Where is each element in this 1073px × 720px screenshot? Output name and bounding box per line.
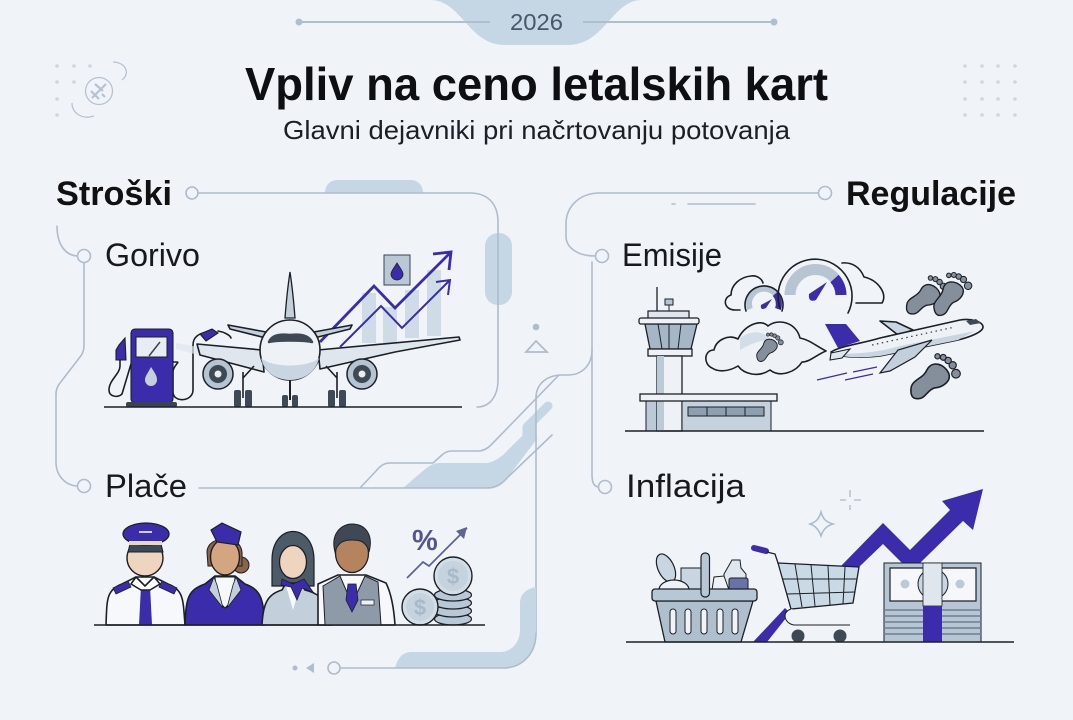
person: pilot: [106, 523, 185, 625]
person: steward in vest: [318, 524, 395, 625]
icon: departing plane: [817, 319, 983, 380]
label: Gorivo: Gorivo: [105, 237, 200, 273]
icon: fuel pump: [109, 329, 231, 407]
illustration: airline staff and pay: [94, 523, 485, 625]
icon: control tower and terminal: [639, 287, 777, 431]
bar chart with rising arrows: [320, 252, 451, 347]
icon: oil barrel: [384, 255, 410, 285]
icon: clouds with gauges: [725, 259, 884, 313]
label: Emisije: Emisije: [622, 237, 722, 273]
label: Plače: Plače: [105, 468, 187, 504]
heading: Stroški: Stroški: [56, 175, 172, 213]
year banner: 2026: [510, 9, 563, 35]
illustration: fuel pump and airliner: [104, 252, 462, 407]
title: Vpliv na ceno letalskih kart: [245, 58, 828, 110]
connector network: [56, 180, 832, 674]
dot grid decoration: [963, 64, 1017, 117]
icon: plane badge with dots: [55, 62, 126, 117]
illustration: tower, clouds, plane and footprints: [625, 259, 984, 431]
icon: percent, arrow and coins: %: [412, 525, 438, 557]
rising price arrow: [753, 489, 983, 642]
icon: stack of money: [884, 563, 981, 642]
icon: percent, arrow and coins: [402, 525, 472, 625]
icon: percent, arrow and coins: $: [447, 564, 459, 589]
heading: Regulacije: Regulacije: [846, 175, 1016, 213]
sparkle decoration: [810, 490, 861, 536]
subtitle: Glavni dejavniki pri načrtovanju potovanja: [283, 115, 791, 145]
icon: shopping cart: [754, 548, 859, 642]
illustration: inflation basket, cart and money: [626, 489, 1014, 642]
icon: airliner: [176, 272, 460, 407]
icon: carbon footprints: [902, 269, 975, 411]
icon: percent, arrow and coins: $: [414, 595, 426, 620]
year banner: [296, 0, 778, 45]
icon: grocery basket: [652, 551, 757, 642]
label: Inflacija: Inflacija: [626, 468, 745, 504]
person: flight attendant in blue: [185, 523, 265, 625]
person: flight attendant in grey: [262, 532, 332, 625]
icon: emission cloud: [706, 322, 826, 374]
